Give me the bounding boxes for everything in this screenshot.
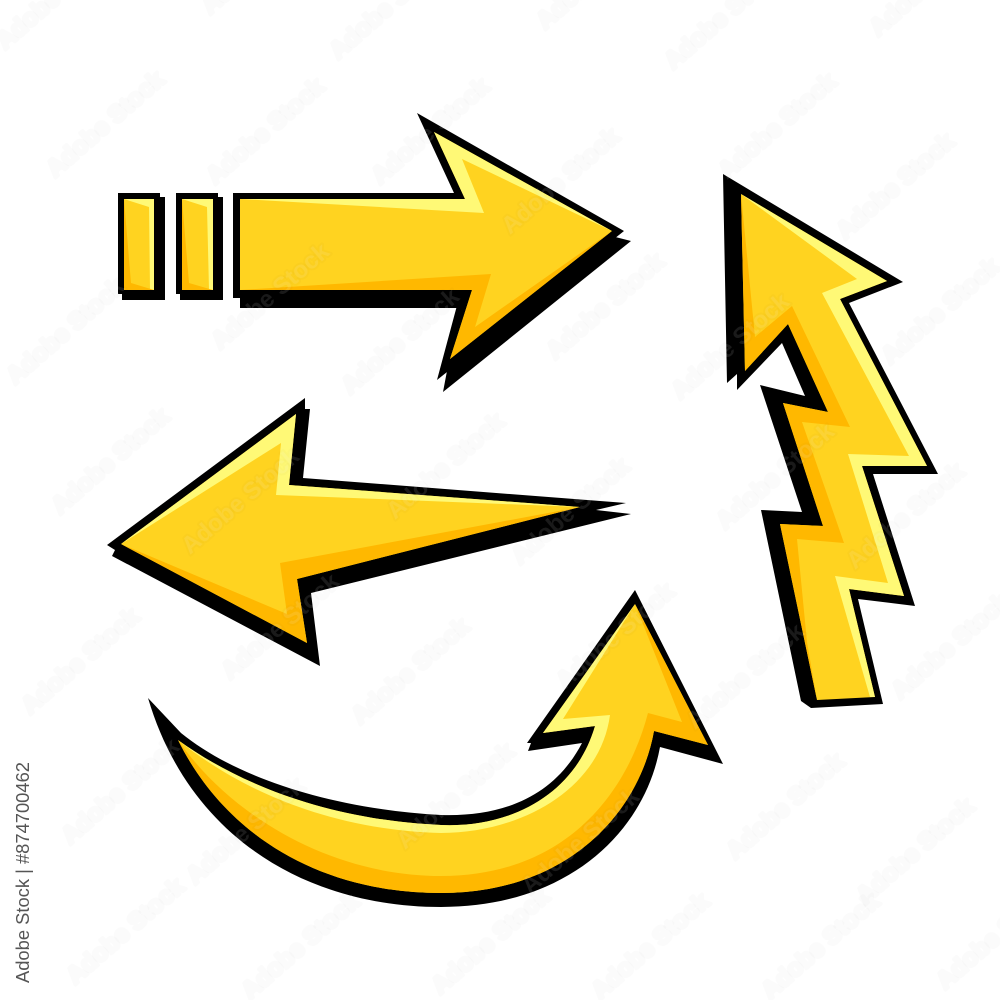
icon: curved upward arrow (148, 590, 723, 907)
left arrow shade (121, 507, 580, 643)
lightning highlight (741, 194, 927, 697)
stock watermark pattern: Adobe Stock (713, 67, 842, 185)
stock watermark pattern: Adobe Stock (551, 577, 680, 695)
stock watermark pattern: Adobe Stock (831, 127, 960, 245)
stock watermark pattern: Adobe Stock (721, 747, 850, 865)
stock watermark pattern: Adobe Stock (666, 287, 795, 405)
stock watermark pattern: Adobe Stock (681, 617, 810, 735)
stock watermark pattern: Adobe Stock (201, 72, 330, 190)
icon: left arrow with tapered tail (107, 398, 631, 666)
stock watermark pattern: Adobe Stock (41, 65, 170, 183)
icon: lightning zigzag arrow (723, 174, 938, 708)
left arrow fill (121, 414, 580, 643)
stock watermark pattern: Adobe Stock (176, 442, 305, 560)
stock watermark pattern: Adobe Stock (711, 417, 840, 535)
left arrow highlight (121, 414, 580, 544)
stock watermark pattern: Adobe Stock (206, 237, 335, 355)
curved arrow highlight (178, 604, 635, 833)
stock watermark pattern: Adobe Stock (366, 72, 495, 190)
vertical stock credit text: Adobe Stock | #874700462 (13, 762, 33, 983)
curved arrow outline and shadow (148, 590, 723, 907)
stock watermark pattern: Adobe Stock (56, 732, 185, 850)
stock watermark pattern: Adobe Stock (16, 602, 145, 720)
arrow body and head (233, 113, 631, 392)
curved arrow fill (178, 604, 708, 893)
stock watermark pattern: Adobe Stock (506, 452, 635, 570)
left arrow outline and shadow (107, 398, 631, 666)
stock watermark pattern: Adobe Stock (346, 612, 475, 730)
lightning shade (741, 194, 850, 700)
lightning outline and shadow (723, 174, 938, 708)
stock watermark pattern: Adobe Stock (516, 782, 645, 900)
second dash block (176, 193, 223, 300)
stock watermark pattern: Adobe Stock (1, 272, 130, 390)
stock watermark pattern: Adobe Stock (541, 247, 670, 365)
stock watermark pattern: Adobe Stock (46, 402, 175, 520)
stock watermark pattern: Adobe Stock (381, 407, 510, 525)
stock watermark pattern: Adobe Stock (336, 282, 465, 400)
stock watermark pattern: Adobe Stock (841, 457, 970, 575)
stock watermark pattern: Adobe Stock (181, 772, 310, 890)
curved arrow shade (178, 604, 708, 893)
lightning fill (741, 194, 927, 700)
icon: dashed right arrow (118, 113, 631, 392)
stock watermark pattern: Adobe Stock (426, 882, 555, 1000)
stock watermark pattern: Adobe Stock (61, 872, 190, 990)
stock watermark pattern: Adobe Stock (391, 737, 520, 855)
stock watermark pattern: Adobe Stock (216, 567, 345, 685)
stock watermark pattern: Adobe Stock (496, 122, 625, 240)
first dash block (118, 193, 165, 300)
stock watermark pattern: Adobe Stock (851, 792, 980, 910)
